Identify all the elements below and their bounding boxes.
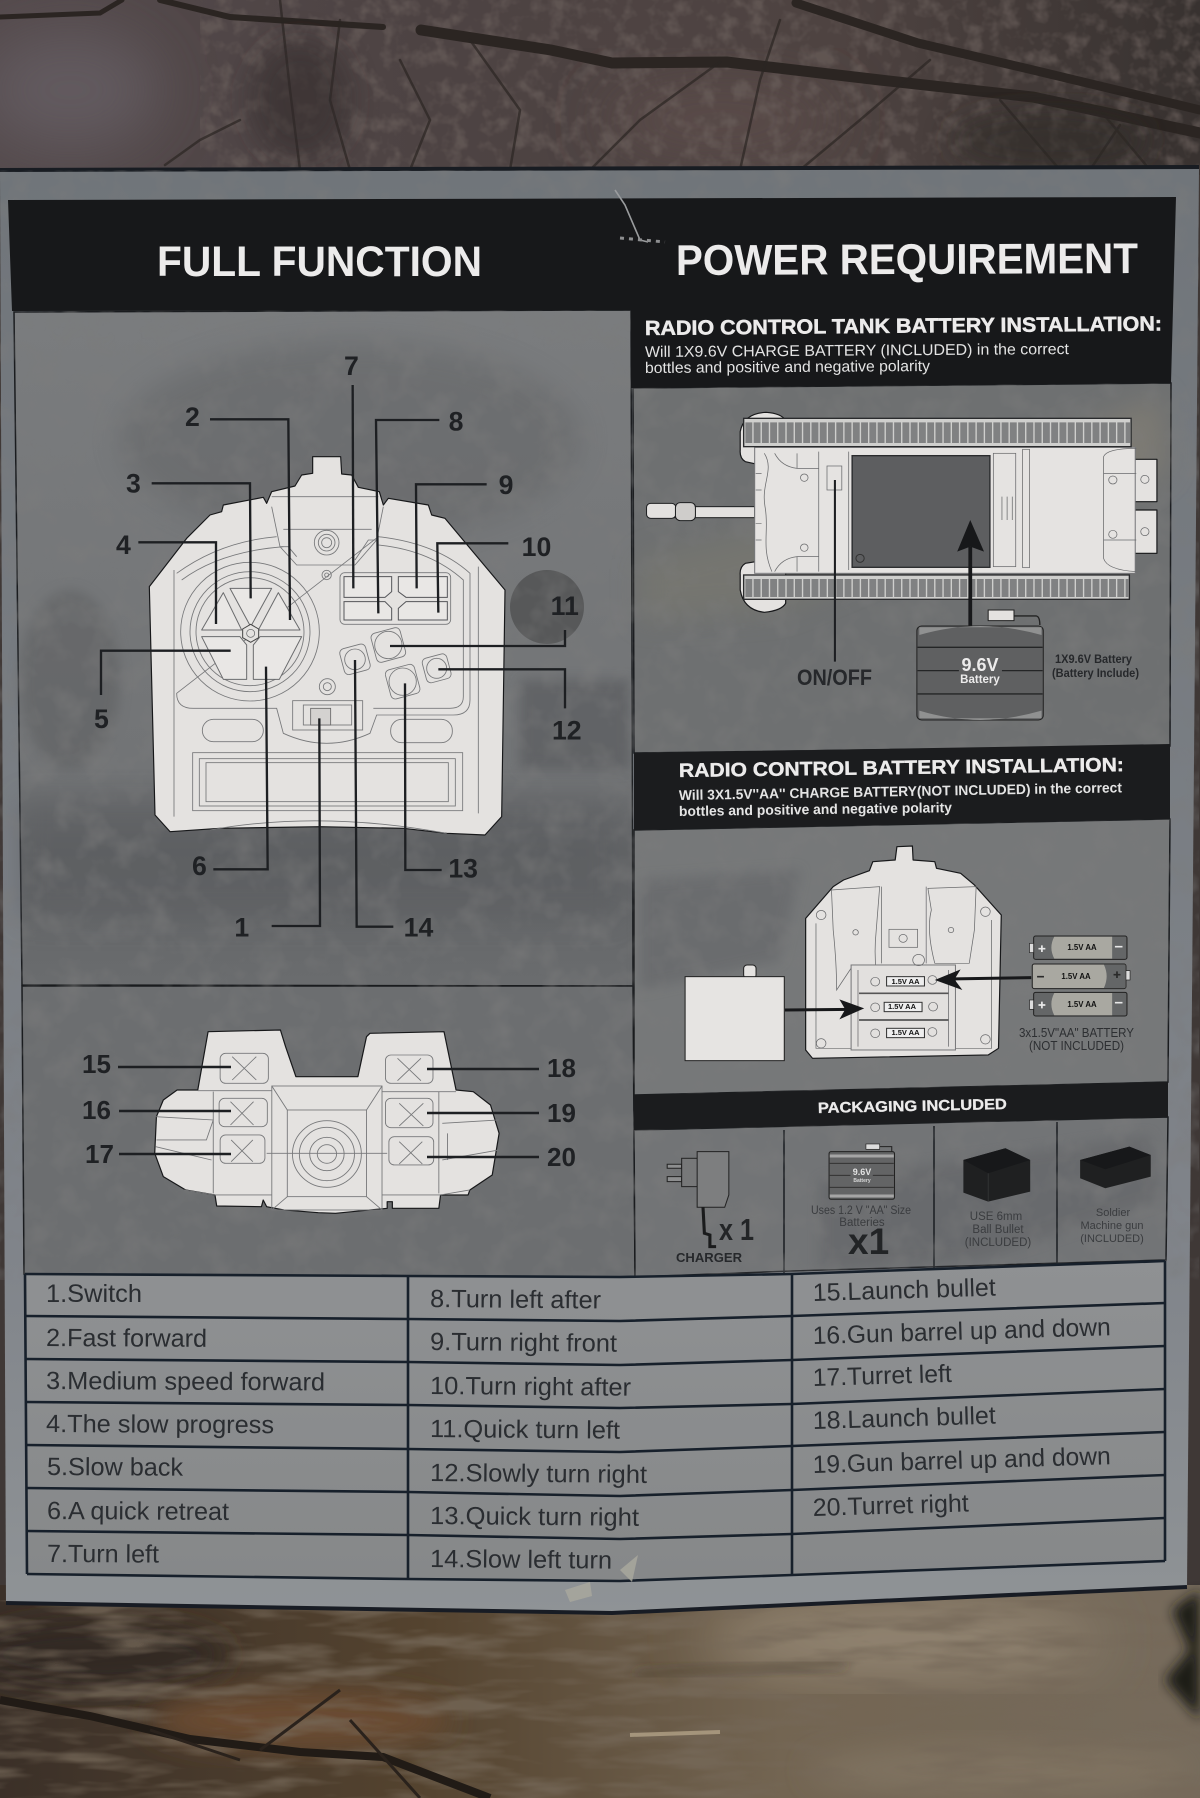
callout 9: 9 — [499, 470, 513, 500]
callout 10 — [437, 532, 551, 613]
packaging: battery pack: Battery — [853, 1178, 871, 1184]
packaging: battery pack: Batteries — [839, 1217, 885, 1229]
callout 8 — [376, 407, 463, 613]
callout 9 — [416, 470, 513, 588]
column 1 labels: 7.Turn left — [47, 1540, 159, 1569]
diagram: controller front — [94, 351, 582, 943]
panel: top of controller diagram background — [22, 986, 635, 1277]
column 2 labels: 8.Turn left after — [430, 1285, 601, 1314]
function table — [25, 1261, 1165, 1581]
AA battery labels — [1061, 943, 1097, 1009]
packaging: charger: CHARGER — [676, 1250, 743, 1265]
diagram: controller top view — [155, 1030, 499, 1213]
diagram: tank with battery — [647, 412, 1157, 720]
column 2 labels: 13.Quick turn right — [430, 1502, 639, 1532]
callout 10: 10 — [522, 532, 551, 562]
table grid — [25, 1261, 1165, 1581]
callout 14: 14 — [404, 913, 433, 943]
table cells background — [25, 1261, 1165, 1581]
packaging: charger — [667, 1152, 754, 1265]
callout 16: 16 — [82, 1095, 111, 1125]
compartment labels: 1.5V AA — [891, 1028, 920, 1037]
packaging: machine gun box: Soldier — [1096, 1207, 1130, 1219]
column 3 labels: 19.Gun barrel up and down — [812, 1442, 1111, 1479]
column 1 labels: 2.Fast forward — [46, 1324, 207, 1353]
label: on/off: ON/OFF — [797, 665, 872, 690]
AA battery labels: 1.5V AA — [1061, 972, 1091, 981]
packaging: machine gun box — [1080, 1147, 1151, 1245]
callout 18: 18 — [547, 1053, 576, 1083]
tank tracks — [744, 418, 1131, 599]
header band: black title strip — [8, 190, 1176, 388]
callout 6 — [192, 667, 268, 881]
column 1 labels — [46, 1280, 325, 1569]
callout 11 — [390, 591, 579, 646]
mottled print texture — [0, 170, 1199, 1280]
center joystick housing — [267, 1086, 387, 1210]
title: power requirement: POWER REQUIREMENT — [676, 235, 1138, 285]
tank battery bay — [852, 456, 990, 567]
column 1 labels: 4.The slow progress — [46, 1410, 274, 1439]
arrow: cover to compartment — [785, 999, 864, 1019]
callout line: on/off — [832, 480, 838, 662]
callout 20: 20 — [547, 1142, 576, 1172]
callout 2: 2 — [185, 402, 200, 432]
small screws — [314, 530, 339, 695]
callout 15: 15 — [82, 1049, 111, 1079]
callout 4: 4 — [116, 530, 131, 560]
9.6V battery pack — [917, 610, 1043, 720]
compartment labels — [888, 977, 920, 1037]
callout 19: 19 — [547, 1098, 576, 1128]
battery cover — [685, 965, 784, 1061]
callout 12: 12 — [552, 715, 582, 745]
heading: tank battery installation: Will 1X9.6V CHARGE BATTERY (INCLUDED) in the correct — [645, 341, 1070, 361]
AA battery labels: 1.5V AA — [1067, 943, 1097, 952]
callouts: controller top view — [82, 1049, 576, 1172]
diagram: controller rear with AA batteries — [685, 846, 1135, 1061]
AA battery labels: 1.5V AA — [1067, 1000, 1097, 1009]
heading: radio control battery installation: bottles and positive and negative polarity — [679, 799, 952, 819]
compartment labels: 1.5V AA — [891, 977, 920, 986]
arrow: battery into bay — [957, 520, 984, 627]
column 3 labels — [812, 1274, 1111, 1522]
label: battery note — [1052, 654, 1139, 680]
background: top forest photo — [0, 0, 1200, 175]
column 2 labels: 11.Quick turn left — [430, 1415, 620, 1445]
packaging: ball bullet box: USE 6mm — [970, 1211, 1022, 1223]
callout 13: 13 — [448, 853, 478, 883]
callout 5 — [94, 651, 231, 734]
direction pad — [340, 573, 451, 624]
panel: full function main diagram background — [14, 310, 633, 986]
column 3 labels: 18.Launch bullet — [812, 1402, 996, 1435]
controller top body — [155, 1030, 499, 1213]
label: 9.6V on battery — [960, 655, 1000, 686]
callout 8: 8 — [449, 407, 463, 437]
control stick — [181, 562, 319, 701]
heading: tank battery installation: bottles and positive and negative polarity — [645, 358, 930, 377]
tank barrel — [647, 503, 755, 521]
packaging: charger: x 1 — [719, 1212, 754, 1247]
controller rear body — [806, 846, 1001, 1058]
callout 4 — [116, 530, 216, 624]
heading: radio control battery installation: RADIO CONTROL BATTERY INSTALLATION: — [679, 754, 1124, 782]
packaging: machine gun box: (INCLUDED) — [1080, 1233, 1144, 1245]
tank hull — [755, 447, 1136, 573]
label: battery note: 1X9.6V Battery — [1055, 654, 1133, 666]
packaging: battery pack — [811, 1144, 911, 1262]
header band: radio control battery — [634, 744, 1170, 830]
column 3 labels: 16.Gun barrel up and down — [812, 1313, 1111, 1350]
heading: radio control battery installation — [679, 754, 1124, 819]
power switch — [293, 701, 363, 730]
column 2 labels: 9.Turn right front — [430, 1328, 617, 1358]
battery compartment — [851, 954, 955, 1050]
column 3 labels: 17.Turret left — [812, 1360, 952, 1392]
callout 5: 5 — [94, 704, 109, 734]
label: 9.6V on battery: Battery — [960, 674, 1000, 686]
heading: radio control battery installation: Will 3X1.5V''AA'' CHARGE BATTERY(NOT INCLUDED) in the correct — [679, 779, 1122, 803]
title: full function: FULL FUNCTION — [157, 238, 482, 286]
packaging: ball bullet box: (INCLUDED) — [965, 1237, 1031, 1249]
panel: packaging included cells — [634, 1117, 1168, 1277]
column 2 labels: 12.Slowly turn right — [430, 1459, 647, 1489]
compartment labels: 1.5V AA — [888, 1002, 917, 1011]
callout 1 — [234, 718, 320, 943]
column 3 labels: 20.Turret right — [812, 1489, 969, 1522]
caption: AA batteries: (NOT INCLUDED) — [1029, 1039, 1124, 1053]
label: battery note: (Battery Include) — [1052, 668, 1139, 680]
AA battery bottom — [1030, 992, 1127, 1016]
shoulder buttons — [219, 1053, 434, 1165]
callout 13 — [405, 683, 478, 883]
callout 6: 6 — [192, 851, 207, 881]
header band: packaging included — [634, 1082, 1168, 1130]
packaging: machine gun box: Machine gun — [1080, 1220, 1144, 1232]
AA battery top — [1030, 936, 1127, 959]
caption: AA batteries — [1019, 1026, 1135, 1053]
callout 2 — [185, 402, 290, 620]
panel: tank battery background — [633, 383, 1171, 753]
callout 14 — [355, 660, 433, 943]
torn tape marks — [565, 1555, 638, 1602]
caption: AA batteries: 3x1.5V"AA" BATTERY — [1019, 1026, 1135, 1040]
column 3 labels: 15.Launch bullet — [812, 1274, 996, 1307]
column 1 labels: 5.Slow back — [47, 1453, 184, 1482]
tank rear blocks — [1135, 459, 1157, 553]
AA battery middle — [1032, 964, 1130, 989]
callout 7: 7 — [344, 351, 359, 381]
column 2 labels — [430, 1285, 647, 1575]
column 1 labels: 3.Medium speed forward — [46, 1367, 325, 1396]
packaging: ball bullet box — [963, 1148, 1031, 1249]
callout 11: 11 — [551, 591, 579, 621]
callout 1: 1 — [234, 913, 249, 943]
callout 17: 17 — [85, 1139, 114, 1169]
column 2 labels: 14.Slow left turn — [430, 1545, 612, 1575]
packaging: battery pack: Uses 1.2 V "AA" Size — [811, 1205, 911, 1217]
callout 3: 3 — [126, 469, 141, 499]
column 1 labels: 6.A quick retreat — [47, 1497, 229, 1526]
packaging: ball bullet box: Ball Bullet — [972, 1224, 1024, 1236]
callout 3 — [126, 469, 251, 598]
oval slots and lower plate — [193, 719, 463, 833]
arrow: batteries to compartment — [935, 969, 1031, 990]
heading: packaging included: PACKAGING INCLUDED — [818, 1096, 1007, 1117]
packaging: battery pack: x1 — [848, 1221, 889, 1262]
heading: tank battery installation: RADIO CONTROL TANK BATTERY INSTALLATION: — [645, 312, 1162, 340]
heading: tank battery installation — [645, 312, 1162, 377]
column 1 labels: 1.Switch — [46, 1280, 142, 1308]
tank wheel ends — [740, 412, 786, 612]
packaging: battery pack: 9.6V — [853, 1167, 871, 1177]
column 2 labels: 10.Turn right after — [430, 1372, 631, 1402]
panel: radio battery background — [634, 819, 1170, 1095]
quick buttons — [339, 627, 452, 700]
controller body — [149, 457, 505, 835]
callout 12 — [438, 669, 582, 745]
background: bottom battlefield photo — [0, 1585, 1200, 1798]
label: 9.6V on battery: 9.6V — [961, 655, 999, 675]
